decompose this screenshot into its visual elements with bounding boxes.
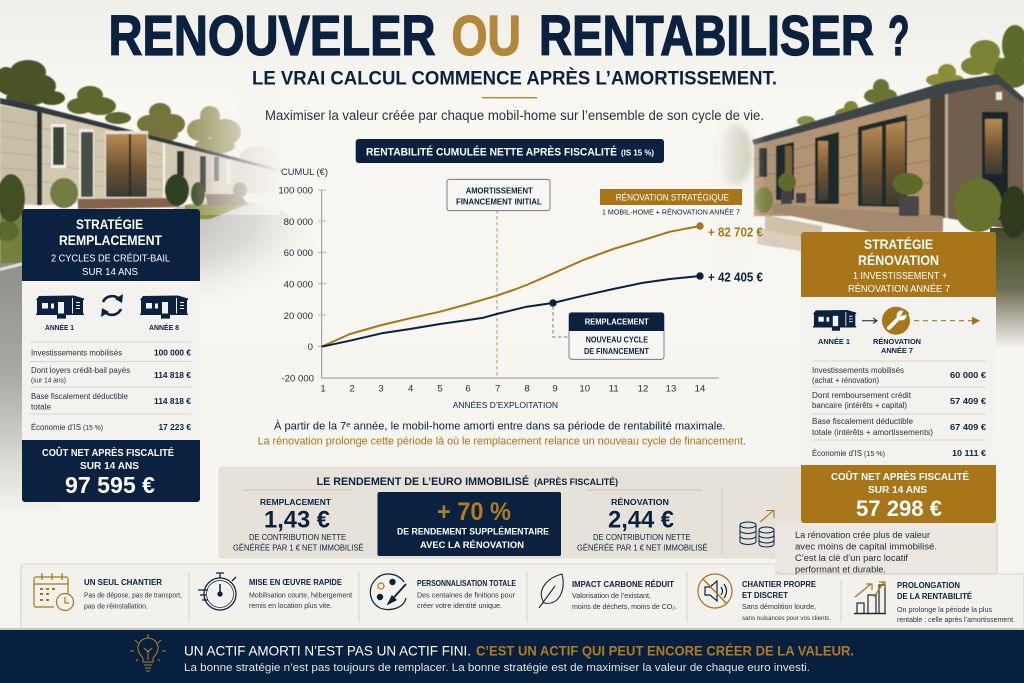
- text block: lecture du graphique: [258, 419, 746, 447]
- text block: lecture du graphique: La rénovation prolonge cette période là où le remplacement relance un nouveau cycle de financement.: [258, 435, 746, 447]
- x labels: 4: [408, 384, 414, 395]
- panel: stratégie remplacement: [22, 209, 200, 502]
- feature: prolongation de la rentabilité: DE LA RENTABILITÉ: [897, 591, 972, 601]
- panel total: 57 298 €: [856, 496, 942, 521]
- walls: [754, 94, 930, 216]
- fade: [185, 90, 280, 215]
- y labels: 100 000: [278, 186, 313, 196]
- x labels: 13: [666, 384, 676, 395]
- panel header: [801, 232, 996, 297]
- panel header: STRATÉGIE: [76, 216, 143, 232]
- dashed arrow: [914, 316, 980, 325]
- icon: calendar: [34, 573, 74, 610]
- data table: Économie d’IS: [31, 423, 81, 432]
- data table: (achat + rénovation): [812, 376, 879, 385]
- callout: création de valeur: C’est la clé d’un parc locatif: [795, 553, 909, 563]
- axes: [322, 190, 719, 378]
- panel header: STRATÉGIE: [864, 236, 933, 252]
- siding: [0, 120, 163, 190]
- openings: [858, 115, 907, 207]
- panel header: RÉNOVATION: [858, 252, 939, 268]
- trees: [0, 60, 276, 170]
- block: remplacement: DE CONTRIBUTION NETTE: [249, 533, 346, 542]
- panel: stratégie rénovation: [801, 232, 996, 523]
- callout: remplacement: [569, 313, 664, 359]
- icon: renewal cycle: [101, 294, 123, 317]
- y labels: 40 000: [284, 280, 313, 290]
- headline: UN ACTIF AMORTI N’EST PAS UN ACTIF FINI.: [184, 643, 471, 659]
- panel header: 1 INVESTISSEMENT +: [853, 271, 947, 282]
- heading: (APRÈS FISCALITÉ): [534, 477, 618, 487]
- callout: création de valeur: [775, 523, 997, 574]
- labels années: [818, 337, 921, 355]
- headline: [184, 643, 854, 659]
- block: rénovation: GÉNÉRÉE PAR 1 € NET IMMOBILISÉ: [577, 544, 708, 553]
- axis title x: ANNÉES D’EXPLOITATION: [453, 400, 558, 410]
- series: remplacement: [322, 276, 700, 347]
- plants: [893, 173, 923, 195]
- feature: impact carbone réduit: Valorisation de l’existant,: [572, 591, 651, 600]
- y labels: -20 000: [281, 374, 314, 384]
- data table: (sur 14 ans): [31, 378, 66, 384]
- data table: Dont remboursement crédit: [812, 391, 912, 400]
- x labels: 6: [465, 384, 471, 395]
- icon: leaf: [539, 574, 563, 608]
- panel: rendement de l'euro immobilisé: [219, 467, 804, 558]
- block: remplacement: GÉNÉRÉE PAR 1 € NET IMMOBILISÉ: [233, 544, 364, 553]
- callout: création de valeur: avec moins de capital immobilisé.: [795, 542, 937, 552]
- data table: 60 000 €: [950, 370, 986, 380]
- panel total: COÛT NET APRÈS FISCALITÉ: [831, 470, 969, 483]
- callout: remplacement: DE FINANCEMENT: [584, 347, 649, 356]
- x labels: 7: [495, 384, 500, 395]
- title: RENOUVELER: [108, 4, 436, 67]
- headline: C’EST UN ACTIF QUI PEUT ENCORE CRÉER DE LA VALEUR.: [476, 643, 854, 659]
- block: +70 %: DE RENDEMENT SUPPLÉMENTAIRE: [397, 526, 550, 538]
- axis title y: CUMUL (€): [281, 167, 328, 177]
- data table: [30, 342, 191, 432]
- feature: impact carbone réduit: moins de déchets, moins de CO₂.: [572, 602, 677, 611]
- heading: LE RENDEMENT DE L’EURO IMMOBILISÉ: [316, 475, 529, 488]
- marker: year 7: [496, 210, 498, 378]
- data table: Dont loyers crédit-bail payés: [31, 366, 130, 375]
- photo: row of mobile homes (left): [0, 60, 320, 512]
- labels années: ANNÉE 1: [818, 337, 850, 346]
- panel header: [22, 209, 200, 281]
- data table: bancaire (intérêts + capital): [812, 401, 907, 410]
- x labels: 8: [524, 384, 530, 395]
- panel header: REMPLACEMENT: [59, 232, 162, 248]
- panel total: COÛT NET APRÈS FISCALITÉ: [42, 446, 174, 459]
- feature: chantier propre et discret: sans nuisances pour vos clients.: [742, 615, 831, 622]
- x labels: 1: [320, 384, 326, 395]
- x labels: 14: [695, 384, 706, 395]
- value: remplacement: + 42 405 €: [708, 271, 763, 285]
- panel header: RÉNOVATION ANNÉE 7: [848, 282, 950, 295]
- feature: prolongation de la rentabilité: PROLONGATION: [897, 580, 960, 590]
- x labels: 2: [349, 384, 355, 395]
- panel total: [801, 465, 996, 523]
- icon: stopwatch: [198, 573, 236, 610]
- block: rénovation: [577, 497, 708, 553]
- x labels: 10: [579, 384, 590, 395]
- x labels: 9: [552, 384, 558, 395]
- x labels: [320, 384, 706, 395]
- trees: [797, 25, 1024, 126]
- supporting line: La bonne stratégie n’est pas toujours de remplacer. La bonne stratégie est de maximiser la valeur de chaque euro investi.: [184, 662, 810, 674]
- y labels: 20 000: [284, 311, 313, 322]
- subtitle: LE VRAI CALCUL COMMENCE APRÈS L’AMORTISSEMENT.: [252, 67, 777, 89]
- data table: totale (intérêts + amortissements): [812, 428, 933, 437]
- data table: 57 409 €: [950, 396, 986, 406]
- feature: prolongation de la rentabilité: rentable : celle après l’amortissement.: [897, 617, 1015, 624]
- tagline: Maximiser la valeur créée par chaque mobil-home sur l’ensemble de son cycle de vie.: [265, 108, 764, 123]
- footer banner: [0, 628, 1024, 683]
- chart heading: RENTABILITÉ CUMULÉE NETTE APRÈS FISCALITÉ: [366, 146, 617, 159]
- icon: mobile home année 1: [36, 296, 84, 319]
- feature: mise en oeuvre rapide: remis en location plus vite.: [249, 601, 332, 610]
- block: +70 %: + 70 %: [437, 498, 511, 526]
- roof: [0, 98, 280, 172]
- icon: muted speaker: [698, 574, 732, 608]
- line chart: [278, 167, 763, 410]
- labels années: [45, 323, 179, 332]
- labels années: ANNÉE 8: [149, 323, 179, 332]
- callout: amortissement: AMORTISSEMENT: [466, 185, 534, 195]
- block: rénovation: 2,44 €: [608, 507, 674, 534]
- feature: chantier propre et discret: Sans démolition lourde,: [742, 602, 816, 611]
- x labels: 5: [437, 384, 443, 395]
- block: +70 %: [378, 492, 561, 556]
- deck and steps: [772, 204, 943, 232]
- y labels: 60 000: [284, 248, 313, 259]
- fade: [716, 100, 766, 270]
- data table: (15 %): [83, 425, 103, 432]
- road: [0, 200, 320, 512]
- panel header: SUR 14 ANS: [82, 266, 138, 278]
- feature: impact carbone réduit: [539, 574, 677, 611]
- block: remplacement: REMPLACEMENT: [260, 497, 332, 507]
- data table: 114 818 €: [154, 396, 191, 406]
- feature: prolongation de la rentabilité: [854, 580, 1015, 624]
- block: remplacement: 1,43 €: [264, 507, 330, 534]
- block: +70 %: AVEC LA RÉNOVATION: [420, 539, 524, 551]
- feature: mise en oeuvre rapide: [198, 573, 352, 610]
- panel total: SUR 14 ANS: [80, 461, 139, 472]
- chart heading: (IS 15 %): [621, 148, 654, 158]
- feature: un seul chantier: pas de réinstallation.: [84, 602, 148, 611]
- panel: bandeau d'atouts: [21, 564, 1024, 629]
- x labels: 3: [378, 384, 384, 395]
- icon: coins with arrow: [740, 510, 774, 547]
- openings: [51, 124, 66, 168]
- feature: chantier propre et discret: ET DISCRET: [742, 590, 789, 600]
- panel total: [22, 440, 200, 502]
- feature: chantier propre et discret: [698, 574, 831, 622]
- photo: renovated mobile home (right): [716, 25, 1024, 348]
- data table: 100 000 €: [154, 348, 191, 358]
- callout: amortissement: FINANCEMENT INITIAL: [456, 197, 542, 207]
- feature: un seul chantier: Pas de dépose, pas de transport,: [84, 591, 182, 600]
- callout: création de valeur: performant et durable.: [795, 564, 886, 574]
- distant trees: [718, 125, 752, 185]
- data table: 67 409 €: [950, 422, 986, 432]
- block: rénovation: RÉNOVATION: [611, 497, 669, 507]
- feature: un seul chantier: [34, 573, 182, 611]
- label: rénovation stratégique: RÉNOVATION STRATÉGIQUE: [616, 192, 729, 203]
- title: OU: [452, 4, 521, 67]
- dividers: [21, 572, 841, 622]
- feature: un seul chantier: UN SEUL CHANTIER: [84, 577, 163, 587]
- feature: prolongation de la rentabilité: On prolonge la période la plus: [897, 605, 992, 614]
- icon: rising bar chart: [854, 582, 886, 614]
- y labels: [278, 186, 314, 384]
- feature: mise en oeuvre rapide: Mobilisation courte, hébergement: [249, 591, 352, 600]
- data table: Investissements mobilisés: [812, 366, 904, 375]
- data table: Base fiscalement déductible: [812, 417, 914, 426]
- feature: personnalisation totale: Des centaines de finitions pour: [417, 591, 516, 600]
- series: rénovation: [322, 226, 700, 347]
- icon: palette: [370, 574, 406, 610]
- icon: light bulb: [130, 634, 166, 671]
- siding: [754, 115, 930, 208]
- panel total: SUR 14 ANS: [868, 485, 927, 496]
- feature: mise en oeuvre rapide: MISE EN ŒUVRE RAPIDE: [249, 577, 342, 587]
- block: remplacement: [233, 497, 364, 553]
- labels années: ANNÉE 1: [45, 323, 74, 332]
- arrow: [862, 318, 877, 323]
- feature: personnalisation totale: [370, 574, 516, 610]
- data table: totale: [31, 402, 52, 412]
- heading: [316, 475, 618, 488]
- data table: [812, 361, 986, 458]
- lawn: [990, 228, 1024, 348]
- connector: [553, 306, 569, 337]
- icon: mobile home année 8: [140, 296, 188, 319]
- x labels: 12: [638, 384, 648, 395]
- callout: remplacement: REMPLACEMENT: [585, 318, 649, 327]
- y labels: 0: [308, 342, 313, 353]
- data table: 17 223 €: [158, 422, 191, 432]
- deck: [78, 198, 180, 209]
- chart heading: [356, 139, 664, 163]
- data table: 10 111 €: [952, 448, 986, 458]
- data table: (15 %): [864, 451, 885, 458]
- icon: wrench: [882, 307, 910, 335]
- feature: impact carbone réduit: IMPACT CARBONE RÉDUIT: [572, 579, 675, 589]
- labels années: RÉNOVATION: [873, 337, 921, 346]
- text block: lecture du graphique: À partir de la 7ᵉ année, le mobil-home amorti entre dans sa période de rentabilité maximale.: [274, 419, 726, 432]
- title: RENTABILISER: [539, 4, 874, 67]
- feature: personnalisation totale: PERSONNALISATION TOTALE: [417, 579, 516, 588]
- callout: amortissement: [447, 179, 550, 211]
- panel total: 97 595 €: [65, 472, 155, 498]
- icon: mobile home: [813, 310, 856, 331]
- callout: remplacement: NOUVEAU CYCLE: [586, 336, 648, 345]
- y labels: 80 000: [284, 217, 313, 228]
- block: rénovation: DE CONTRIBUTION NETTE: [593, 533, 690, 542]
- data table: Investissements mobilisés: [31, 348, 122, 358]
- shrubs: [0, 174, 25, 222]
- data table: Économie d’IS: [812, 449, 862, 458]
- roof: [752, 74, 1024, 145]
- callout: création de valeur: La rénovation crée plus de valeur: [795, 530, 930, 540]
- data table: 114 818 €: [154, 370, 191, 380]
- ground: [0, 205, 24, 263]
- label: rénovation stratégique: 1 MOBIL-HOME + RÉNOVATION ANNÉE 7: [602, 208, 740, 217]
- title: [108, 4, 910, 67]
- walls: [0, 105, 37, 205]
- label: rénovation stratégique: [600, 189, 742, 217]
- x labels: 11: [609, 384, 619, 395]
- title: ?: [888, 4, 910, 67]
- panel header: 2 CYCLES DE CRÉDIT-BAIL: [51, 252, 170, 264]
- feature: personnalisation totale: créer votre identité unique.: [417, 601, 502, 610]
- feature: chantier propre et discret: CHANTIER PROPRE: [742, 579, 816, 589]
- value: rénovation: + 82 702 €: [708, 226, 763, 240]
- data table: Base fiscalement déductible: [31, 392, 129, 401]
- labels années: ANNÉE 7: [881, 346, 913, 355]
